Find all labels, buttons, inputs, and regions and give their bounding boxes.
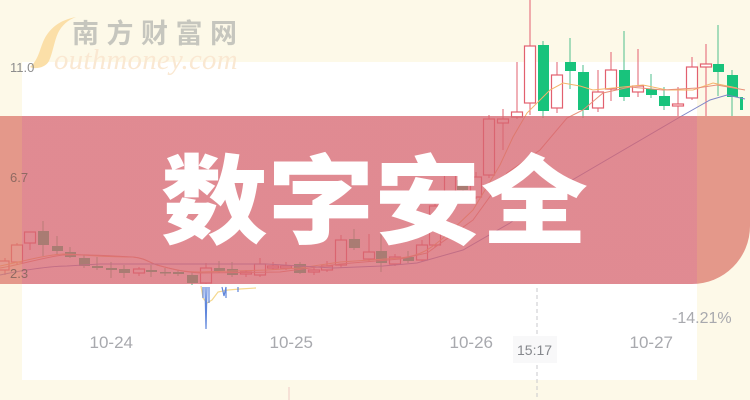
moving average lines bbox=[0, 83, 745, 275]
date axis labels bbox=[90, 333, 673, 352]
falling candle wicks bbox=[43, 25, 732, 285]
watermark Chinese name: 南方财富网 bbox=[72, 12, 244, 51]
date axis labels: 10-26 bbox=[450, 333, 493, 352]
percent change label: -14.21% bbox=[672, 310, 732, 327]
date axis labels: 10-27 bbox=[630, 333, 673, 352]
vertical crosshair lines bbox=[289, 288, 537, 400]
watermark: Southmoney logo bbox=[30, 12, 244, 76]
white chart panel bbox=[22, 62, 697, 380]
price axis labels: 2.3 bbox=[10, 266, 28, 281]
rising candle wicks bbox=[5, 0, 706, 284]
time tooltip bbox=[513, 336, 557, 363]
logo swoosh S bbox=[30, 17, 76, 68]
time tooltip: 15:17 bbox=[517, 342, 552, 358]
price axis labels: 11.0 bbox=[10, 60, 34, 75]
intraday spike below candles bbox=[201, 286, 256, 329]
rising candle bodies bbox=[0, 46, 712, 283]
falling candle bodies bbox=[38, 45, 743, 283]
title: 数字安全 bbox=[161, 125, 588, 265]
pink title band bbox=[0, 116, 750, 284]
date axis labels: 10-25 bbox=[270, 333, 313, 352]
watermark url: outhmoney.com bbox=[54, 44, 238, 76]
date axis labels: 10-24 bbox=[90, 333, 133, 352]
price axis labels: 6.7 bbox=[10, 170, 28, 185]
price axis labels bbox=[10, 60, 34, 281]
